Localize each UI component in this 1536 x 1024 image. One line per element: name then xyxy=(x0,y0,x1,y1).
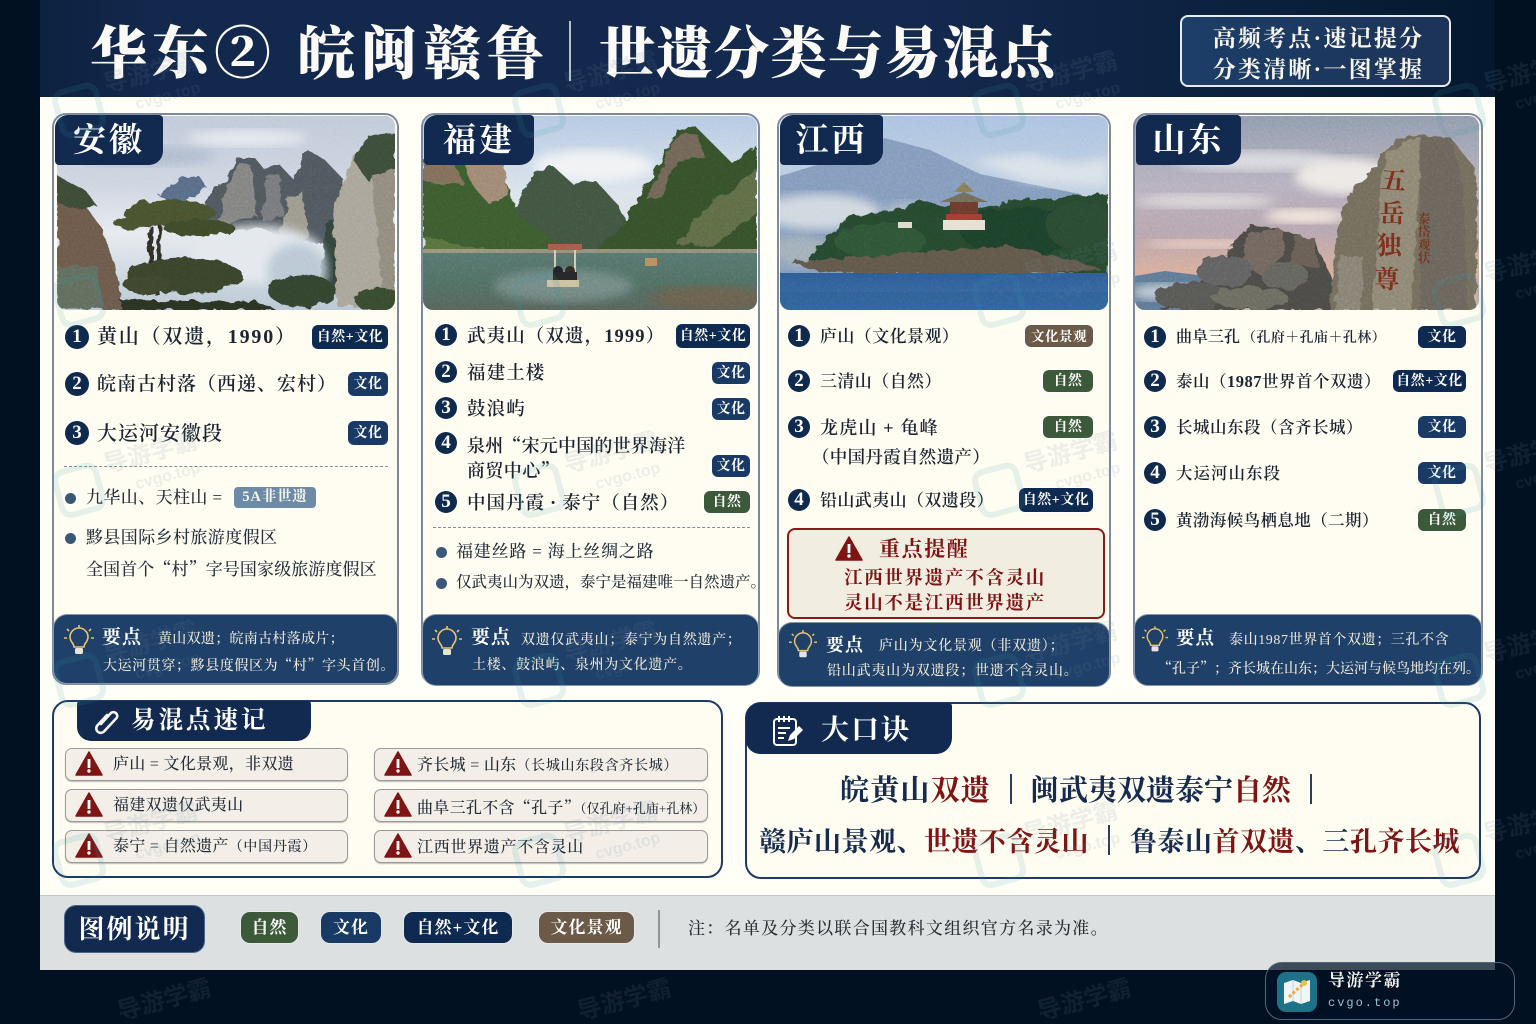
item 3: 龙虎山 + 龟峰 xyxy=(820,418,939,438)
photo: 泰山: 泰岱观状 xyxy=(1416,211,1430,265)
item 1: 黄山（双遗，1990） xyxy=(97,326,297,348)
panel: 易混点速记 xyxy=(52,700,723,878)
heading: 易混点速记 xyxy=(77,701,311,741)
mantra line 1: 皖黄山双遗 闽武夷双遗泰宁自然 xyxy=(840,775,1291,807)
title: 华东② xyxy=(90,23,276,86)
item 2 xyxy=(787,369,1094,393)
panel: 安徽 xyxy=(52,113,399,685)
item 4 xyxy=(787,487,1094,513)
photo: 庐山 xyxy=(780,116,1108,310)
tip: 要点 xyxy=(1176,629,1215,649)
item 1: 庐山（文化景观） xyxy=(820,327,959,346)
tab: 山东 xyxy=(1136,115,1241,165)
item 4: 4 xyxy=(441,432,451,453)
photo: 黄山 xyxy=(57,116,395,310)
item 5: 自然 xyxy=(712,495,742,510)
watermark overlay: cvgo.top xyxy=(133,829,202,863)
icon: bulb xyxy=(789,630,817,658)
brand badge xyxy=(1265,962,1515,1020)
confusion item 2 xyxy=(65,789,348,822)
item 1: 文化景观 xyxy=(1031,329,1087,344)
item 1: 自然+文化 xyxy=(680,329,746,344)
tab: 福建: 福建 xyxy=(443,123,515,159)
item 2: 2 xyxy=(72,373,82,394)
watermark overlay: cvgo.top xyxy=(1053,829,1122,863)
confusion item 5: 曲阜三孔不含“孔子”（仅孔府+孔庙+孔林） xyxy=(417,795,705,818)
legend: 自然: 自然 xyxy=(252,918,288,937)
panel: 福建 xyxy=(421,113,760,685)
watermark overlay: cvgo.top xyxy=(133,79,202,113)
note: 黟县: 黟县国际乡村旅游度假区 xyxy=(86,528,277,547)
watermark overlay: cvgo.top xyxy=(1053,459,1122,493)
item 2: 2 xyxy=(794,370,804,391)
subtitle badge: 高频考点·速记提分 xyxy=(1213,26,1424,51)
tip: 要点 xyxy=(826,635,864,655)
tab: 江西 xyxy=(780,115,883,165)
watermark overlay: 导游学霸 xyxy=(101,47,201,98)
item 1: 1 xyxy=(1150,326,1160,347)
watermark overlay: 导游学霸 xyxy=(1021,47,1121,98)
item 2: 文化 xyxy=(716,366,746,381)
main paper background xyxy=(40,97,1495,895)
photo: 泰山: 独 xyxy=(1376,232,1404,260)
note: 九华山: 九华山、天柱山 = xyxy=(86,488,222,507)
item 3: 3 xyxy=(72,422,82,443)
item 3: 3 xyxy=(441,397,451,418)
item 1: 1 xyxy=(72,326,82,347)
watermark overlay: cvgo.top xyxy=(593,459,662,493)
item 3: 3 xyxy=(794,416,804,437)
legend band xyxy=(40,895,1495,970)
tip xyxy=(54,615,397,683)
watermark overlay: 导游学霸 xyxy=(561,797,661,848)
item 5: 5 xyxy=(1150,509,1160,530)
watermark overlay: cvgo.top xyxy=(1053,269,1122,303)
callout: 重点提醒 xyxy=(787,528,1105,619)
callout: 重点提醒: 灵山不是江西世界遗产 xyxy=(844,594,1046,614)
item 3: 长城山东段（含齐长城） xyxy=(1176,418,1363,437)
legend: 文化 xyxy=(321,912,381,943)
tip: 黄山双遗；皖南古村落成片； xyxy=(158,632,344,647)
item 2: 自然 xyxy=(1054,374,1082,389)
tab: 江西: 江西 xyxy=(796,123,868,159)
item 4: 4 xyxy=(794,489,804,510)
note: 九华山: 5A非世遗 xyxy=(242,489,308,505)
item 5: 5 xyxy=(441,491,451,512)
confusion item 4: 齐长城 = 山东（长城山东段含齐长城） xyxy=(417,757,678,774)
title xyxy=(90,21,1057,87)
note: 九华山 xyxy=(65,487,316,508)
item 5: 黄渤海候鸟栖息地（二期） xyxy=(1176,511,1379,530)
item 3: 文化 xyxy=(716,402,746,417)
tip: “孔子”；齐长城在山东；大运河与候鸟地均在列。 xyxy=(1158,658,1480,678)
panel: 大口诀 xyxy=(745,702,1481,879)
tip xyxy=(1135,615,1481,685)
tip: 双遗仅武夷山；泰宁为自然遗产； xyxy=(521,633,742,648)
icon: paperclip xyxy=(95,710,118,734)
item 4 xyxy=(434,431,751,483)
tip xyxy=(779,623,1109,686)
tip: 泰山1987世界首个双遗；三孔不含 xyxy=(1229,633,1449,648)
note: 丝路: 福建丝路 = 海上丝绸之路 xyxy=(456,542,654,561)
item 5 xyxy=(434,490,751,514)
tip xyxy=(423,615,758,685)
note: 双遗: 仅武夷山为双遗，泰宁是福建唯一自然遗产。 xyxy=(456,574,766,591)
item 2: 2 xyxy=(1150,370,1160,391)
watermark overlay: 导游学霸 xyxy=(561,427,661,478)
item 2 xyxy=(1143,369,1467,393)
item 3 xyxy=(434,396,751,421)
item 1: 1 xyxy=(441,324,451,345)
item 2: 自然+文化 xyxy=(1396,374,1463,389)
item 3 xyxy=(1143,415,1467,439)
callout: 重点提醒: 重点提醒 xyxy=(879,537,969,561)
legend: 文化景观: 文化景观 xyxy=(550,918,622,937)
item 2 xyxy=(64,371,389,397)
legend title xyxy=(65,906,204,952)
item 4: 大运河山东段 xyxy=(1176,464,1281,483)
tab: 安徽 xyxy=(55,115,163,165)
item 1 xyxy=(1143,325,1467,349)
item 2: 2 xyxy=(441,361,451,382)
item 3: 3 xyxy=(1150,416,1160,437)
confusion item 1: 庐山 = 文化景观，非双遗 xyxy=(113,756,294,773)
note: 黟县 xyxy=(65,528,377,580)
subtitle badge xyxy=(1180,15,1451,87)
legend: 文化景观 xyxy=(539,912,634,943)
legend divider xyxy=(658,910,660,948)
item 1: 武夷山（双遗，1999） xyxy=(467,327,665,347)
legend: 自然+文化 xyxy=(404,912,512,943)
legend: 文化: 文化 xyxy=(333,918,369,937)
item 3: 自然 xyxy=(1054,420,1082,435)
tip: 庐山为文化景观（非双遗）； xyxy=(879,639,1064,654)
heading: 大口诀: 大口诀 xyxy=(821,715,911,746)
item 5: 自然 xyxy=(1428,513,1456,528)
panel: 江西 xyxy=(777,113,1111,686)
legend title: 图例说明 xyxy=(78,915,190,944)
icon: bulb xyxy=(64,625,94,654)
watermark overlay: cvgo.top xyxy=(1053,79,1122,113)
tip: 大运河贯穿；黟县度假区为“村”字头首创。 xyxy=(103,655,395,675)
brand url: cvgo.top xyxy=(1328,996,1402,1010)
item 1 xyxy=(787,324,1094,348)
tip: 土楼、鼓浪屿、泉州为文化遗产。 xyxy=(472,658,692,673)
watermark overlay: 导游学霸 xyxy=(561,47,661,98)
icon: map logo xyxy=(1277,972,1317,1012)
item 4: 文化 xyxy=(1428,466,1456,481)
item 3: 大运河安徽段 xyxy=(97,423,223,445)
item 1 xyxy=(64,324,389,350)
confusion item 3 xyxy=(65,830,348,863)
icon: notepad xyxy=(773,716,803,746)
item 2: 文化 xyxy=(354,377,382,392)
item 3: 鼓浪屿 xyxy=(467,400,526,420)
legend note: 注：名单及分类以联合国教科文组织官方名录为准。 xyxy=(688,919,1109,938)
confusion item 6 xyxy=(374,830,708,863)
confusion item 4 xyxy=(374,748,708,781)
item 5 xyxy=(1143,508,1467,532)
watermark overlay: 导游学霸 xyxy=(1021,237,1121,288)
heading: 易混点速记: 易混点速记 xyxy=(131,707,268,734)
watermark overlay: 导游学霸 xyxy=(1021,427,1121,478)
confusion item 2: 福建双遗仅武夷山 xyxy=(113,797,243,814)
item 3 xyxy=(787,415,1094,467)
mantra line 2: 赣庐山景观、世遗不含灵山 鲁泰山首双遗、三孔齐长城 xyxy=(759,827,1460,857)
confusion item 5 xyxy=(374,789,708,822)
panel: 山东 xyxy=(1133,113,1483,685)
watermark overlay: cvgo.top xyxy=(1053,649,1122,683)
item 4: 商贸中心” xyxy=(467,457,559,483)
photo: 泰山: 岳 xyxy=(1379,200,1405,228)
watermark overlay: cvgo.top xyxy=(133,649,202,683)
legend: 自然 xyxy=(241,912,298,943)
watermark overlay: cvgo.top xyxy=(593,79,662,113)
title: 皖闽赣鲁 xyxy=(297,22,549,87)
item 2: 三清山（自然） xyxy=(820,372,942,391)
watermark overlay: 导游学霸 xyxy=(561,617,661,668)
watermark overlay: 导游学霸 xyxy=(101,427,201,478)
item 2: 皖南古村落（西递、宏村） xyxy=(97,374,337,395)
callout: 重点提醒: 江西世界遗产不含灵山 xyxy=(844,569,1046,589)
icon: warning xyxy=(835,536,863,561)
note: 黟县: 全国首个“村”字号国家级旅游度假区 xyxy=(86,555,377,580)
watermark overlay: cvgo.top xyxy=(133,459,202,493)
item 4: 铅山武夷山（双遗段） xyxy=(820,491,994,510)
item 4: 自然+文化 xyxy=(1023,493,1089,508)
item 1: 文化 xyxy=(1428,330,1456,345)
item 2: 福建土楼 xyxy=(467,364,545,384)
item 1: 1 xyxy=(794,325,804,346)
tab: 安徽: 安徽 xyxy=(73,123,145,159)
item 1 xyxy=(434,323,751,349)
watermark overlay: 导游学霸 xyxy=(1021,617,1121,668)
item 4: 文化 xyxy=(716,459,746,474)
watermark overlay: cvgo.top xyxy=(593,649,662,683)
watermark overlay: 导游学霸 xyxy=(101,797,201,848)
item 3 xyxy=(64,420,389,446)
brand name: 导游学霸 xyxy=(1328,971,1402,990)
watermark overlay: cvgo.top xyxy=(593,829,662,863)
watermark overlay: 导游学霸 xyxy=(1021,797,1121,848)
item 2 xyxy=(434,360,751,385)
subtitle badge: 分类清晰·一图掌握 xyxy=(1213,57,1424,82)
heading: 大口诀 xyxy=(746,703,952,754)
tip: 铅山武夷山为双遗段；世遗不含灵山。 xyxy=(827,664,1079,679)
confusion item 1 xyxy=(65,748,348,781)
tip: 要点 xyxy=(471,627,511,648)
item 4 xyxy=(1143,461,1467,485)
photo: 泰山: 五 xyxy=(1380,167,1407,196)
item 1: 自然+文化 xyxy=(317,330,383,345)
legend: 自然+文化: 自然+文化 xyxy=(417,918,499,937)
confusion item 3: 泰宁 = 自然遗产（中国丹霞） xyxy=(113,838,317,855)
item 1: 曲阜三孔（孔府＋孔庙＋孔林） xyxy=(1176,329,1386,346)
tab: 山东: 山东 xyxy=(1152,123,1224,159)
tab: 福建 xyxy=(424,115,534,165)
confusion item 6: 江西世界遗产不含灵山 xyxy=(417,839,584,856)
item 2: 泰山（1987世界首个双遗） xyxy=(1176,372,1381,391)
item 5: 中国丹霞 · 泰宁（自然） xyxy=(467,494,679,514)
item 4: 泉州“宋元中国的世界海洋 xyxy=(467,432,685,458)
title: 世遗分类与易混点 xyxy=(599,24,1057,86)
item 3: （中国丹霞自然遗产） xyxy=(812,447,990,467)
item 4: 4 xyxy=(1150,462,1160,483)
photo: 泰山 xyxy=(1135,116,1479,310)
icon: bulb xyxy=(432,626,462,655)
photo: 泰山: 尊 xyxy=(1374,266,1400,294)
header band xyxy=(40,0,1495,97)
icon: bulb xyxy=(1142,626,1168,652)
photo: 武夷山 xyxy=(423,116,757,310)
watermark overlay: 导游学霸 xyxy=(101,617,201,668)
item 3: 文化 xyxy=(1428,420,1456,435)
item 3: 文化 xyxy=(354,426,382,441)
tip: 要点 xyxy=(102,627,142,648)
